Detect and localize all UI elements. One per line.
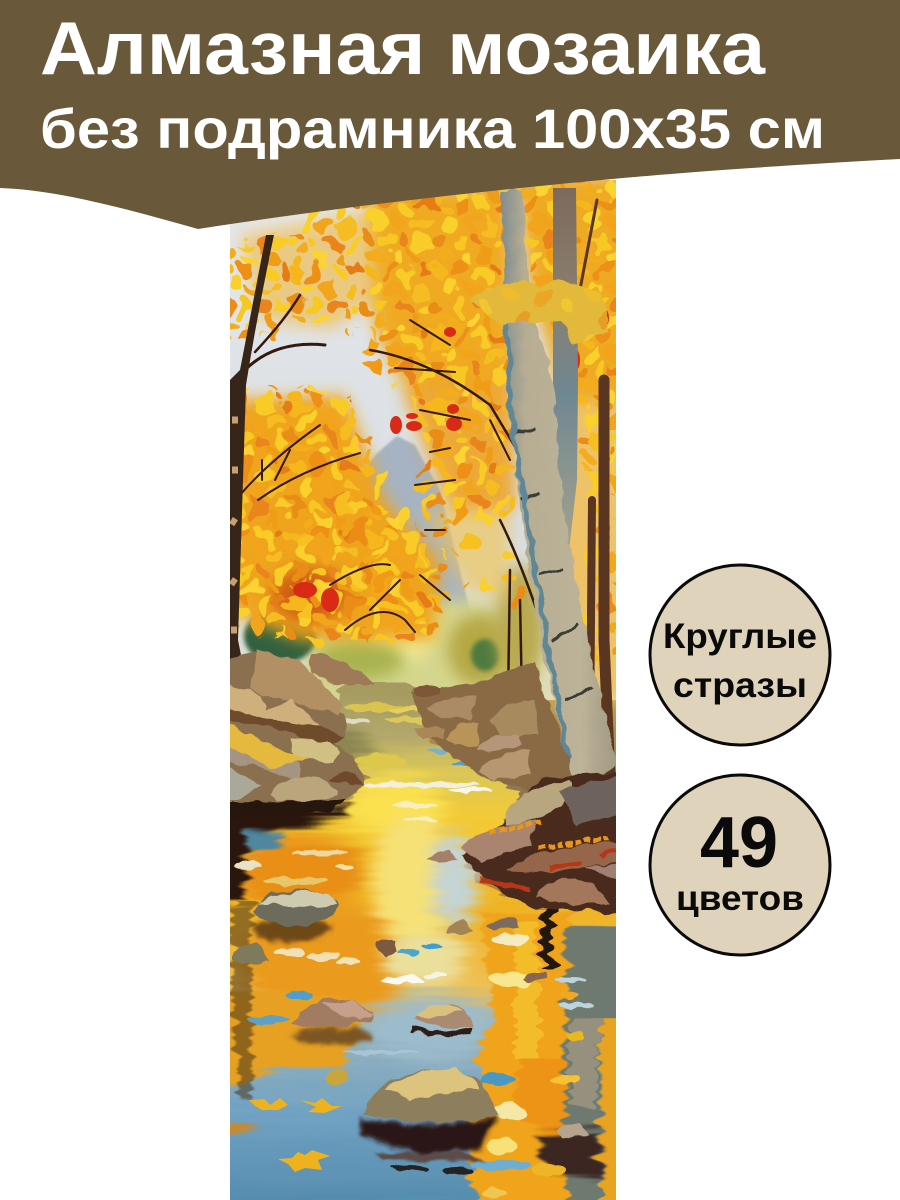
badge: round rhinestones: Круглые (663, 617, 817, 656)
sunlit valley (244, 565, 544, 710)
painting: autumn river landscape (230, 180, 616, 1200)
floating leaves (249, 1098, 342, 1172)
river water (230, 682, 616, 1200)
foliage crossing the trunks (470, 280, 610, 345)
sky (210, 170, 630, 700)
badge: 49 colours: 49 (700, 803, 778, 883)
main birch trunk (500, 190, 616, 790)
second birch trunk (552, 188, 578, 547)
right river bank rocks (411, 662, 616, 916)
header banner (0, 0, 900, 229)
subtitle: без подрамника 100х35 см (40, 97, 825, 160)
badge: round rhinestones (650, 565, 830, 745)
foliage base tones (225, 175, 630, 640)
title: Алмазная мозаика (40, 6, 766, 90)
badge: 49 colours: цветов (676, 879, 804, 918)
left trunk (230, 235, 274, 659)
right side background glow (555, 360, 630, 700)
stones in the water (232, 850, 590, 1175)
badge: 49 colours (650, 775, 830, 955)
distant mountain (368, 436, 468, 608)
left river bank rocks (230, 649, 375, 814)
branches (240, 295, 540, 700)
red leaves (293, 306, 609, 612)
background tree stems (578, 200, 610, 780)
badge: round rhinestones: стразы (673, 666, 807, 705)
right side reflections (463, 908, 616, 1200)
leaf masses (222, 170, 640, 660)
water highlights (234, 703, 593, 1197)
